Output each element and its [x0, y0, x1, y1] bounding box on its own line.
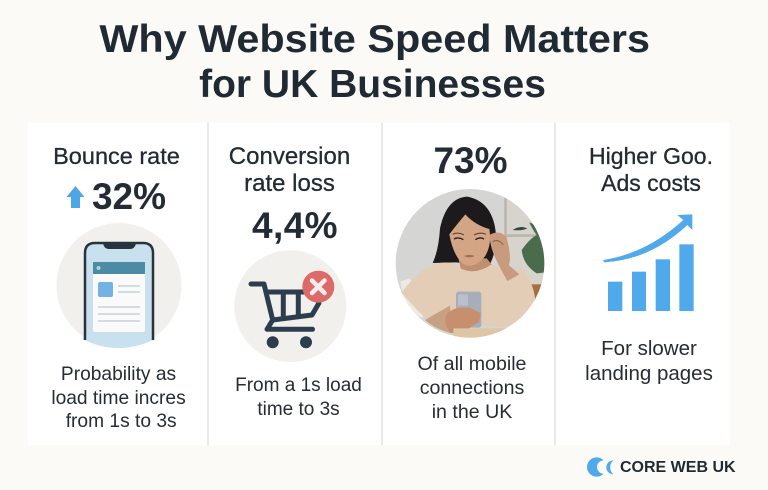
divider lines: [207, 123, 209, 445]
stat: 73%: 73%: [433, 140, 508, 181]
panel: stats background: [28, 123, 730, 445]
icon: up arrow: [66, 186, 84, 208]
icon: logo mark: [587, 457, 614, 477]
text: brand name: CORE WEB UK: [620, 459, 736, 476]
panel: mobile connections: [396, 140, 544, 423]
panel: google ads costs: [585, 143, 713, 385]
stat: 4,4%: 4,4%: [252, 205, 338, 246]
heading: conversion rate loss: [229, 143, 350, 197]
text: ads description: landing pages: [585, 362, 713, 385]
panel: conversion rate loss: [229, 143, 362, 420]
heading: higher google ads costs: [589, 143, 713, 196]
title: [99, 18, 650, 106]
text: bounce description: Probability as: [61, 364, 176, 385]
chart: rising bars with arrow: [603, 214, 694, 311]
heading: bounce rate: Bounce rate: [53, 143, 180, 169]
text: mobile description: Of all mobile: [418, 353, 526, 375]
text: bounce description: load time incres: [51, 388, 186, 408]
icon: phone: [56, 223, 182, 348]
panel: bounce rate: [51, 143, 186, 432]
text: ads description: For slower: [601, 337, 697, 360]
title: for UK Businesses: [199, 63, 546, 106]
text: conversion description: [235, 375, 362, 420]
photo: woman using phone: [396, 189, 544, 338]
text: mobile description: connections: [420, 377, 524, 399]
heading: conversion rate loss: rate loss: [244, 170, 335, 197]
text: conversion description: From a 1s load: [235, 375, 362, 396]
text: ads description: [585, 337, 713, 385]
heading: higher google ads costs: Higher Goo.: [589, 143, 713, 169]
text: mobile description: [418, 353, 526, 423]
text: bounce description: [51, 364, 186, 432]
logo: core web uk: [587, 457, 736, 477]
text: mobile description: in the UK: [432, 401, 512, 423]
heading: conversion rate loss: Conversion: [229, 143, 350, 170]
icon: cart with cross: [234, 250, 346, 362]
stat: 32%: 32%: [92, 176, 166, 217]
title: Why Website Speed Matters: [100, 18, 650, 61]
heading: higher google ads costs: Ads costs: [601, 170, 701, 196]
text: conversion description: time to 3s: [257, 399, 340, 420]
text: bounce description: from 1s to 3s: [66, 411, 177, 432]
